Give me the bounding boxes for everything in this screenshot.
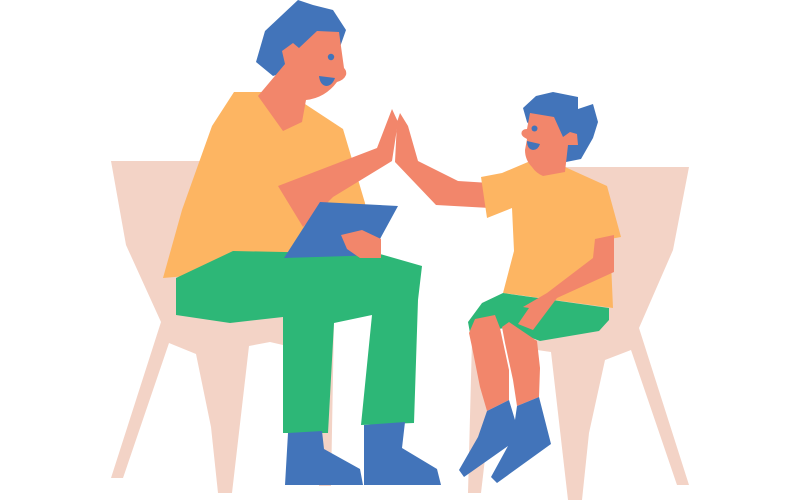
- father trousers: [176, 251, 422, 433]
- father raised arm: [278, 109, 398, 227]
- chair: father's chair: [111, 161, 334, 493]
- chair: boy's chair: [468, 167, 689, 500]
- father left shoe: [285, 431, 363, 485]
- boy lower arm: [518, 235, 614, 330]
- figure: father: [163, 0, 441, 485]
- figure: boy: [395, 92, 621, 483]
- father hair: [256, 0, 346, 76]
- boy hair: [523, 92, 598, 162]
- boy shorts: [468, 293, 609, 341]
- father lower hand: [341, 230, 381, 258]
- father mouth: [319, 76, 335, 86]
- boy right leg: [502, 322, 540, 406]
- boy shirt: [481, 162, 621, 308]
- boy mouth: [527, 141, 540, 150]
- father right shoe: [364, 422, 441, 485]
- father shirt: [163, 92, 372, 278]
- boy left leg: [469, 315, 509, 411]
- boy head: [521, 113, 578, 176]
- father head and neck: [258, 31, 346, 131]
- tablet: [284, 202, 398, 258]
- boy raised arm: [395, 113, 490, 208]
- boy shoes: [459, 397, 551, 483]
- boy eye: [532, 126, 538, 132]
- father eye: [328, 54, 334, 60]
